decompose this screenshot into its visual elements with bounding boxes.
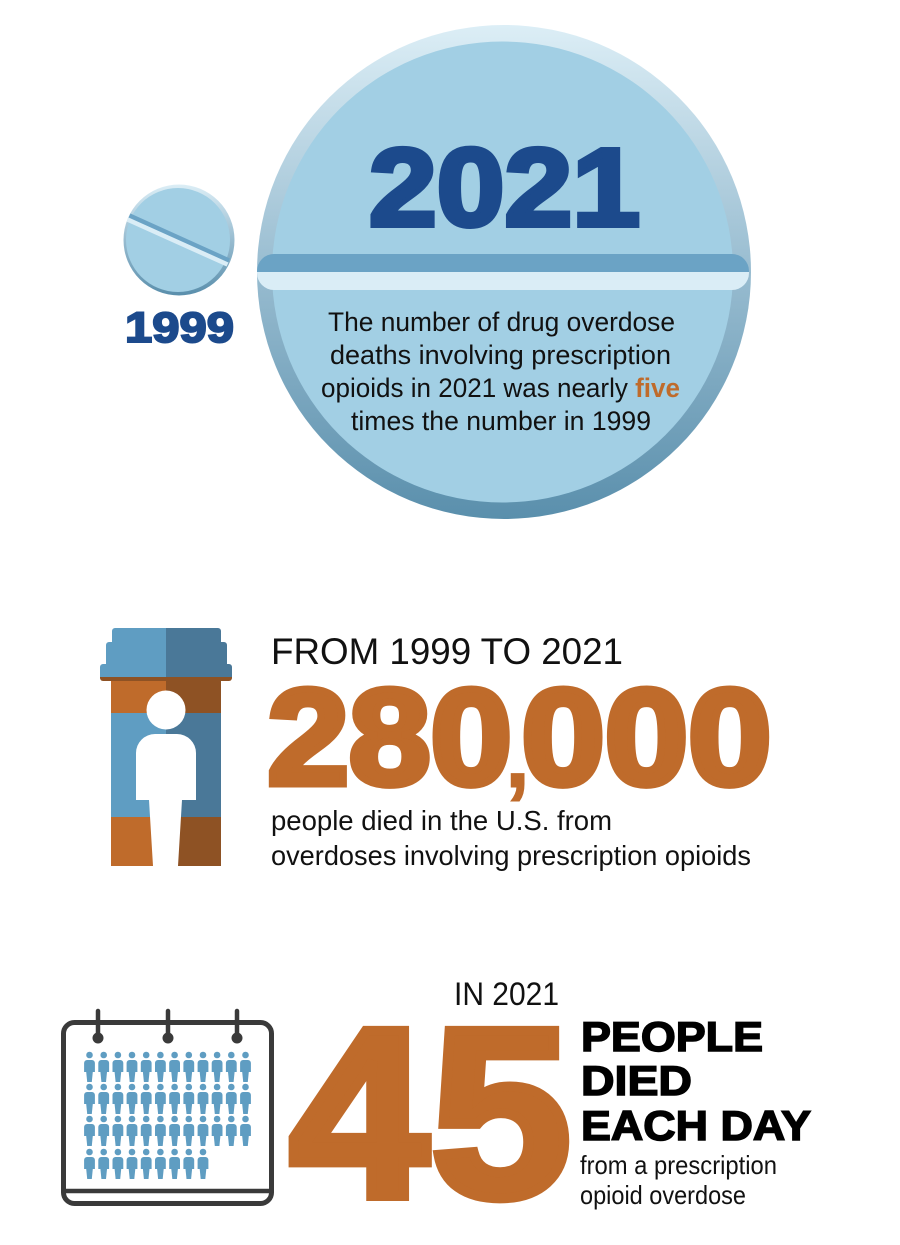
big number: 280,000: 000 [522, 661, 772, 813]
heading: people died each day: EACH DAY [581, 1102, 811, 1149]
panel: large pill 2021 [257, 25, 751, 519]
large pill body [257, 25, 751, 519]
big number: 280,000: , [505, 707, 530, 807]
text block: overdose comparison: times the number in 1999 [351, 406, 651, 436]
text block: overdose comparison: opioids in 2021 was nearly five [321, 373, 680, 403]
big number: 280,000: 280 [268, 661, 512, 813]
heading: people died each day [581, 1013, 811, 1149]
big number: 280,000 [268, 661, 772, 813]
text block: people died [271, 805, 751, 871]
text block: overdose comparison [321, 307, 680, 436]
label: 1999: 1999 [125, 304, 234, 352]
people grid: 45 figures [84, 1052, 251, 1179]
icon: pill bottle with person [100, 628, 232, 866]
big number: 45: 5 [431, 979, 571, 1245]
big number: 45: 4 [290, 979, 428, 1245]
text block: overdose comparison: The number of drug overdose [328, 307, 675, 337]
calendar frame [63, 1011, 272, 1204]
text block: people died: people died in the U.S. from [271, 805, 612, 836]
heading: people died each day: PEOPLE [581, 1013, 763, 1060]
text block: people died: overdoses involving prescription opioids [271, 840, 751, 871]
pill score line [257, 254, 749, 290]
icon: calendar with people [63, 1011, 272, 1204]
text block: from a prescription opioid overdose: opioid overdose [580, 1180, 746, 1210]
text block: from a prescription opioid overdose: from a prescription [580, 1150, 777, 1180]
heading: 2021: 2021 [369, 126, 640, 250]
label: in 2021: IN 2021 [454, 976, 559, 1012]
big number: 45 [290, 979, 571, 1245]
heading: from 1999 to 2021: FROM 1999 TO 2021 [271, 631, 623, 672]
icon: small pill 1999 [124, 184, 234, 296]
heading: people died each day: DIED [581, 1057, 692, 1104]
text block: overdose comparison: deaths involving prescription [330, 340, 671, 370]
text block: from a prescription opioid overdose [580, 1150, 777, 1210]
